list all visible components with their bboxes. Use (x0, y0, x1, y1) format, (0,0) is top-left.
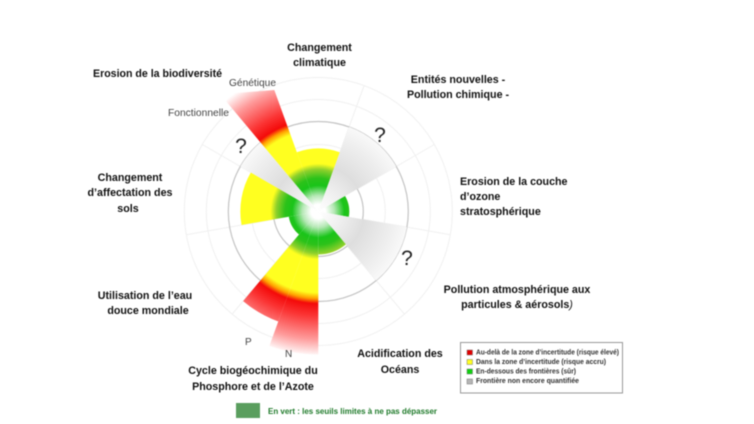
sector: cycle du phosphore (243, 212, 318, 322)
label: cycle biogéochimique: Cycle biogéochimique du (188, 365, 318, 377)
legend item: yellow: Dans la zone d’incertitude (risque accru) (476, 359, 606, 366)
legend item: green: En-dessous des frontières (sûr) (476, 368, 576, 376)
green key note: En vert : les seuils limites à ne pas dépasser (268, 407, 437, 416)
legend item: grey: Frontière non encore quantifiée (476, 378, 579, 385)
sector: biodiversité fonctionnelle (240, 142, 318, 212)
sector: biodiversité génétique (226, 90, 318, 212)
legend item: red: Au-delà de la zone d’incertitude (risque élevé) (476, 350, 619, 356)
question mark: aérosols: ? (401, 247, 413, 270)
label: cycle biogéochimique: Phosphore et de l’Azote (192, 381, 314, 393)
label: changement climatique: climatique (293, 57, 346, 69)
label: utilisation de l'eau douce: douce mondiale (107, 305, 189, 317)
planetary boundaries radial chart (184, 78, 452, 355)
sector: entités nouvelles (318, 127, 396, 212)
label: génétique: Génétique (229, 78, 276, 89)
label: acidification des océans: Océans (381, 364, 419, 376)
label: N: N (285, 349, 292, 360)
label: entités nouvelles: Entités nouvelles - (411, 74, 506, 86)
legend (460, 342, 622, 393)
sector: changement climatique (297, 149, 340, 212)
sector: couche d'ozone (318, 196, 349, 217)
boundary rings (228, 122, 408, 302)
question mark: biodiversité fonctionnelle: ? (235, 135, 247, 158)
sector: acidification des océans (318, 212, 346, 254)
label: changement d'affectation des sols: sols (117, 203, 139, 215)
label: changement d'affectation des sols: d’affectation des (88, 187, 173, 199)
label: couche d'ozone: d’ozone (460, 191, 500, 203)
label: changement d'affectation des sols: Changement (98, 172, 163, 184)
label: acidification des océans: Acidification des (357, 348, 443, 360)
label: P: P (245, 337, 252, 348)
sector: cycle de l'azote (269, 212, 318, 354)
legend box (460, 342, 622, 393)
label: changement climatique: Changement (287, 42, 352, 54)
label: pollution atmosphérique: Pollution atmosphérique aux (444, 284, 590, 296)
sector: eau douce (289, 212, 318, 234)
sector: changement d'affectation des sols (240, 172, 318, 225)
question mark: entités nouvelles: ? (374, 124, 386, 147)
label: érosion de la biodiversité: Erosion de la biodiversité (93, 68, 222, 80)
label: couche d'ozone: stratosphérique (460, 206, 541, 218)
label: utilisation de l'eau douce: Utilisation de l’eau (98, 290, 192, 302)
label: pollution atmosphérique: particules & aérosols) (461, 299, 573, 311)
faint background grid (184, 78, 452, 346)
green key swatch (236, 403, 260, 418)
label: couche d'ozone: Erosion de la couche (460, 176, 568, 188)
label: fonctionnelle: Fonctionnelle (168, 108, 229, 119)
sector: aérosols (318, 212, 407, 280)
label: entités nouvelles: Pollution chimique - (407, 89, 509, 101)
